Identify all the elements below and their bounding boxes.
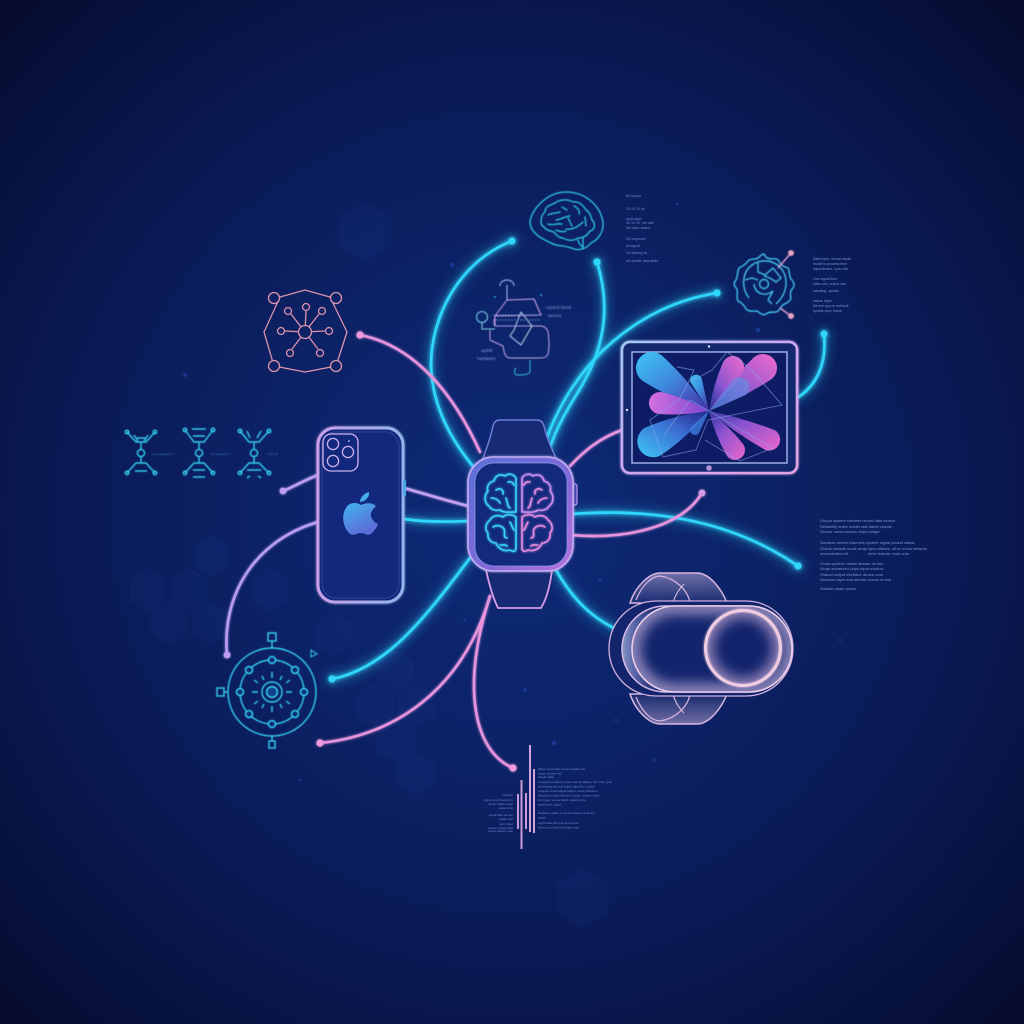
watch case [468,457,573,571]
text block: right of top brain: all signal [626,244,640,248]
text block: far right: Reliability index model rate latest update [820,524,893,529]
flow diagram labels [477,305,572,361]
icon: circular system [217,633,317,748]
flower petals [636,352,780,460]
text block: bottom right of waveform: Wave signal data streams stable rate [538,767,586,771]
text block: bottom right of waveform: latency and channel output state [538,826,580,830]
headset bottom band [630,694,727,724]
headset mid shell [622,606,792,692]
text block: bottom left of waveform: output feature map [488,829,513,833]
text block: bottom left of waveform: sensor data output [488,802,513,806]
text block: bottom right of waveform: output [538,816,546,820]
tablet buttons [626,345,712,471]
text block: bottom left of waveform: analysis [502,793,513,797]
text block: right of top brain: sync layer [626,217,643,221]
headset front plate [632,606,792,692]
molecule labels: ion wireless in [211,452,230,456]
headset band inner arcs [636,576,690,721]
tablet screen [632,352,787,463]
node dots: cyan [328,237,828,683]
text block: bottom left of waveform: signal data stream [488,813,513,817]
text block: bottom right of waveform: processing unit and signal, data filter, output [538,784,595,788]
text block: right of gear: model in process time [813,262,847,266]
icon: top brain [530,192,603,250]
wireframe polygons [650,352,782,461]
node dots: pink [224,331,705,772]
waveform [517,745,535,849]
text block: right of gear: data core, output rate [813,282,846,286]
text block: bottom right of waveform: signal data link sync and stream [538,821,580,825]
watch crown [572,484,577,505]
text block: right of gear: Device app on network [813,304,849,308]
text block: bottom right of waveform: output sample rate [538,772,562,776]
brain left hemisphere [485,474,516,551]
text block: far right: Cross system mobile stream on link [820,561,883,566]
icons: molecule row [125,428,278,478]
icon: flow diagram [476,280,572,375]
text block: far right: drive feature node core [868,551,910,556]
text block: far right: Sensor cores stream chips bridge [820,529,880,534]
connector curves: cyan [328,237,828,683]
VR headset [609,573,793,724]
flow diagram labels: sensor [548,313,562,318]
text block: right of top brain: all update data state [626,259,658,263]
molecule 3 [238,429,271,478]
text block: far right: Output system streams neural data sensor [820,518,896,523]
phone side button [403,480,406,496]
molecule 1 [125,430,157,475]
text block: right of gear: status, layer [813,299,833,303]
text block: bottom left of waveform: signal sync frequency [484,798,513,802]
background particles [183,202,842,782]
text block: right of gear: input stream, sync rate [813,267,848,271]
text block: right of gear: update sync frame [813,309,842,313]
text block: bottom right of waveform [538,767,612,830]
text block: far right: orchestration kit [820,551,849,556]
text block: far right: Smarter state cycles [820,586,856,591]
text block: bottom right of waveform: signal sync output [538,802,561,806]
headset lens [707,612,779,684]
phone [318,428,406,602]
icon: pink network [264,290,347,372]
text block: right of top brain: file data, status [626,226,650,230]
text block: bottom right of waveform: frequency model inference output, stream ready [538,794,600,798]
molecule labels [152,452,278,456]
text block: bottom right of waveform: low power sensor band, update cycle [538,798,586,802]
flow diagram labels: control block [546,305,572,310]
text block: right of top brain: 00 10 10, net rate [626,221,654,225]
text block: bottom left of waveform: output rate [499,817,513,821]
text block: bottom left of waveform [484,793,513,833]
background hexagons [130,202,609,928]
headset outer shell [609,601,793,696]
molecule labels: ion exchange in [152,452,173,456]
text block: bottom left of waveform: sync band [499,822,513,826]
text block: bottom right of waveform: Frequency analysis, phase and amplitude, low noise, gain [538,780,612,784]
text block: right of gear: handling, update [813,289,839,293]
text block: bottom left of waveform: sensor output data [488,826,513,830]
headset top band [630,573,727,603]
text block: bottom right of waveform: sampled neural signal feature vector transform [538,789,598,793]
watch [468,420,577,608]
icon: gear [734,250,794,319]
brain right hemisphere [522,474,553,551]
flow diagram labels: hardware [477,356,496,361]
text block: far right [820,518,927,591]
apple logo [343,492,378,535]
connector curves: pink and lavender [224,331,705,772]
text block: right of top brain: 28 response [626,237,646,241]
text block: right of gear: Live signal flow [813,277,837,281]
phone inner edge [322,432,399,598]
phone body [318,428,403,602]
text block: bottom right of waveform: feature label [538,775,554,779]
text block: far right: Decision layer and stream neural on link [820,577,891,582]
watch screen [475,463,567,566]
tablet frame [622,342,797,473]
text block: bottom left of waveform: stream link [498,806,513,810]
text block: far right: Script advanced chips input window [820,566,883,571]
molecule labels: cycle ok [267,452,278,456]
text block: right of gear [813,257,851,313]
text block: far right: Shared output interface device core [820,572,884,577]
flow diagram labels: uplink [481,348,494,353]
text block: bottom right of waveform: Realtime update on sensor stream to device [538,811,595,815]
camera module [323,434,358,471]
watch straps [483,420,556,458]
text block: right of top brain: 16 latency ok ... [626,251,651,255]
text block: right of top brain: 20 20 10 ok [626,207,645,211]
molecule 2 [183,428,215,477]
text block: far right: Global module mode array sync stream, other cross network [820,546,927,551]
text block: right of top brain: Ab layout [626,194,641,198]
tablet [622,342,797,473]
text block: right of top brain [626,194,658,263]
text block: right of gear: Data input, neural model [813,257,851,261]
text block: far right: Sandbox series channels system signal packet stable [820,540,915,545]
